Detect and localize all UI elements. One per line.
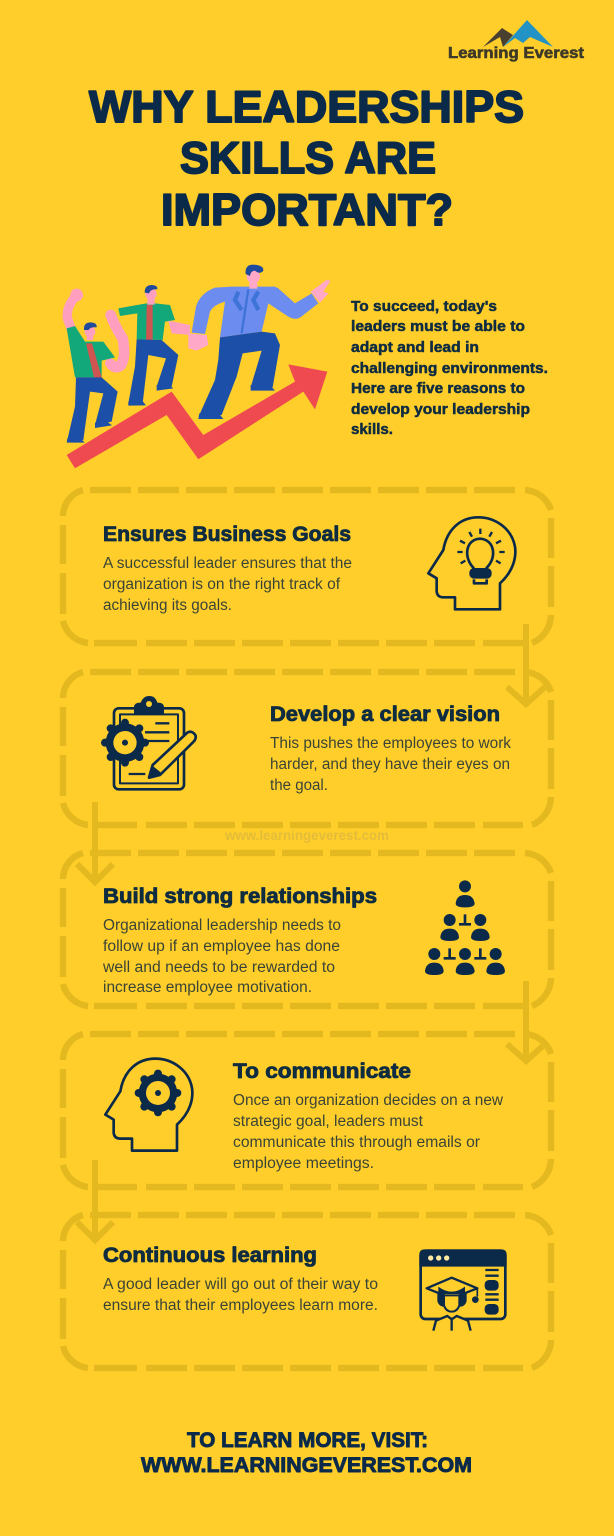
logo wordmark: Learning Everest <box>448 45 585 62</box>
body text: organization is on the right track of <box>103 576 341 593</box>
heading: Ensures Business Goals <box>103 523 351 546</box>
arrow: panel 4 to panel 5 <box>77 1160 113 1240</box>
footer call to action: TO LEARN MORE, VISIT: <box>187 1429 428 1452</box>
body text: well and needs to be rewarded to <box>102 959 335 976</box>
body text <box>270 735 511 794</box>
panel border <box>63 490 551 643</box>
body text: A good leader will go out of their way to <box>103 1276 378 1293</box>
arrow: panel 2 to panel 3 <box>77 802 113 882</box>
icon: people hierarchy <box>425 880 505 975</box>
title: SKILLS ARE <box>180 134 436 183</box>
footer call to action: WWW.LEARNINGEVEREST.COM <box>141 1454 472 1477</box>
body text: achieving its goals. <box>103 597 232 614</box>
intro text: To succeed, today's <box>351 299 497 315</box>
title <box>89 83 524 235</box>
body text: strategic goal, leaders must <box>233 1113 424 1130</box>
intro text: challenging environments. <box>351 361 548 377</box>
icon: online graduation window <box>419 1249 507 1331</box>
panel: develop a clear vision <box>63 672 551 825</box>
panel: to communicate <box>63 1034 551 1187</box>
heading: Build strong relationships <box>103 885 377 908</box>
body text: ensure that their employees learn more. <box>103 1297 378 1314</box>
panel border <box>63 672 551 825</box>
heading: Develop a clear vision <box>270 703 500 726</box>
intro text: adapt and lead in <box>351 340 479 356</box>
body text: communicate this through emails or <box>233 1134 480 1151</box>
small man <box>67 289 122 443</box>
title: WHY LEADERSHIPS <box>89 83 524 132</box>
icon: head with light bulb <box>428 517 515 609</box>
body text: Once an organization decides on a new <box>233 1092 504 1109</box>
body text: follow up if an employee has done <box>103 938 340 955</box>
icon: clipboard with gear and pencil <box>101 696 196 789</box>
intro text: Here are five reasons to <box>351 381 525 397</box>
body text: Organizational leadership needs to <box>103 917 341 934</box>
middle man <box>111 285 190 406</box>
heading: Continuous learning <box>103 1244 317 1267</box>
panel: build strong relationships <box>63 853 551 1006</box>
body text <box>103 555 352 614</box>
panel border <box>63 1034 551 1187</box>
footer call to action <box>141 1429 472 1477</box>
body text: This pushes the employees to work <box>270 735 511 752</box>
body text: harder, and they have their eyes on <box>270 756 510 773</box>
body text: employee meetings. <box>233 1155 374 1172</box>
red rising arrow <box>67 364 327 468</box>
intro text: develop your leadership <box>351 402 530 418</box>
logo mountains <box>483 20 553 47</box>
intro text: skills. <box>351 422 393 438</box>
icon: head with gear <box>105 1059 192 1151</box>
panel border <box>63 1215 551 1368</box>
arrow: panel 1 to panel 2 <box>507 624 545 704</box>
watermark: www.learningeverest.com <box>224 828 389 843</box>
panel: ensures business goals <box>63 490 551 643</box>
body text <box>233 1092 504 1172</box>
body text: increase employee motivation. <box>103 979 312 996</box>
lead man <box>188 265 331 419</box>
body text <box>102 917 341 996</box>
panel: continuous learning <box>63 1215 551 1368</box>
body text: the goal. <box>270 777 328 794</box>
body text: A successful leader ensures that the <box>103 555 352 572</box>
body text <box>103 1276 378 1314</box>
arrow: panel 3 to panel 4 <box>507 981 545 1061</box>
title: IMPORTANT? <box>161 186 453 235</box>
logo: Learning Everest <box>448 20 585 62</box>
intro text: leaders must be able to <box>351 319 525 335</box>
heading: To communicate <box>233 1060 411 1083</box>
illustration: team climbing a rising arrow <box>67 265 331 468</box>
panel border <box>63 853 551 1006</box>
intro text <box>351 299 548 438</box>
